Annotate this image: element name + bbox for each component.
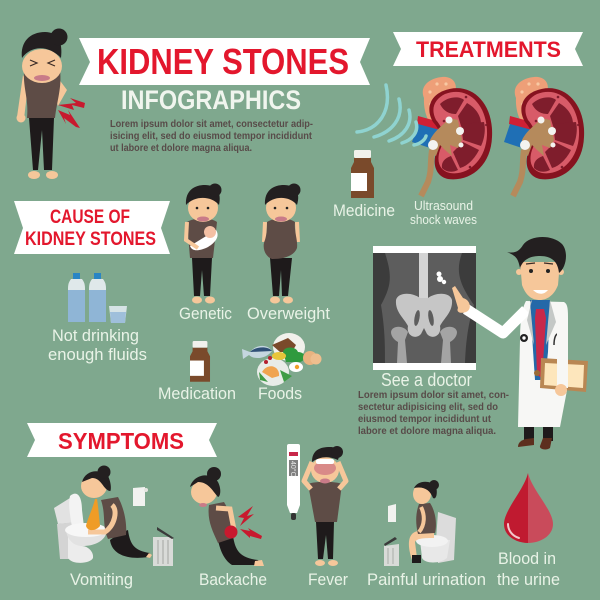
icon: medicine bottle [351,150,374,198]
label: painful urination: Painful urination [367,570,486,589]
label: blood in the urine: Blood in [498,549,556,568]
symptoms banner [27,423,217,457]
icon: ultrasound waves [357,85,426,145]
label: genetic: Genetic [179,304,232,323]
doctor text block: sectetur adipisicing elit, sed do [358,401,498,413]
symptoms banner: SYMPTOMS [58,428,184,454]
icon: trash can [153,527,174,566]
figure: woman vomiting [54,466,152,563]
label: medication: Medication [158,384,236,403]
label: not drinking enough fluids: enough fluids [48,345,147,364]
label: blood in the urine: the urine [497,570,560,589]
icon: thermometer: 40°C [289,461,297,477]
label: overweight: Overweight [247,304,330,323]
label: not drinking enough fluids [48,326,147,364]
label: ultrasound shock waves [410,198,477,227]
label: blood in the urine [497,549,560,589]
x-ray image [373,246,476,370]
label: not drinking enough fluids: Not drinking [52,326,139,345]
label: ultrasound shock waves: Ultrasound [414,198,473,213]
intro text block: ut labore et dolore magna aliqua. [110,142,252,154]
icon: kidney with stones [504,77,584,196]
label: backache: Backache [199,570,267,589]
figure: woman with painful urination [384,480,456,566]
cause of kidney stones banner: KIDNEY STONES [25,229,156,250]
intro text block: Lorem ipsum dolor sit amet, consectetur adip- [110,118,313,130]
figure: woman with backache [190,467,264,566]
icon: foods [242,333,322,386]
treatments banner: TREATMENTS [416,37,561,62]
doctor text block [358,389,509,437]
intro text block: isicing elit, sed do eiusmod tempor incididunt [110,130,312,142]
label: vomiting: Vomiting [70,570,133,589]
icon: blood drop [504,473,553,543]
title banner: KIDNEY STONES [97,41,349,82]
figure: overweight woman [264,184,300,304]
icon: thermometer [287,444,300,520]
figure: woman with back pain [16,28,85,179]
cause of kidney stones banner [14,201,170,254]
intro text block [110,118,313,154]
label: medicine: Medicine [333,201,395,220]
label: foods: Foods [258,384,302,403]
label: fever: Fever [308,570,348,589]
subtitle: INFOGRAPHICS [121,85,301,115]
doctor text block: Lorem ipsum dolor sit amet, con- [358,389,509,401]
icon: kidney with stones (ultrasound) [412,77,492,196]
icon: medication bottle [190,341,210,382]
label: see a doctor: See a doctor [381,370,472,390]
treatments banner [393,32,583,66]
figure: doctor [452,237,588,449]
label: ultrasound shock waves: shock waves [410,212,477,227]
icon: water bottles and glass [68,273,127,323]
doctor text block: eiusmod tempor incididunt ut [358,413,491,425]
figure: woman with fever [304,446,346,566]
cause of kidney stones banner: CAUSE OF [50,207,130,228]
figure: woman holding baby [186,184,222,304]
doctor text block: labore et dolore magna aliqua. [358,425,496,437]
